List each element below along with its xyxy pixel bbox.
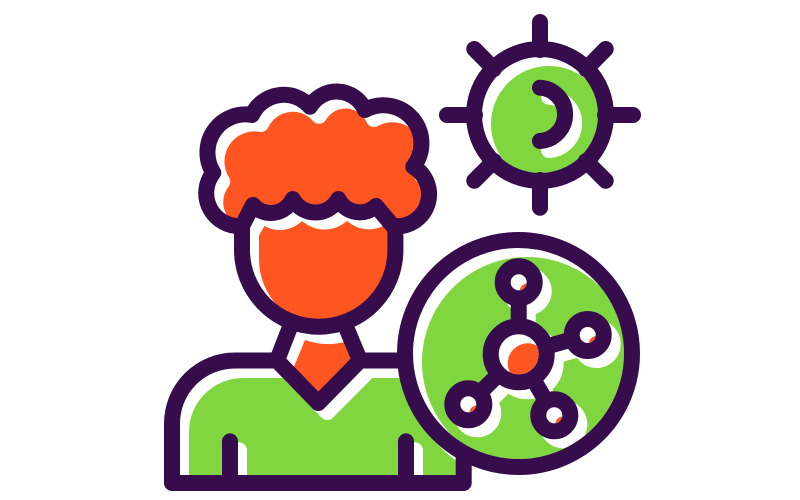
icon: person with virus and molecule	[164, 14, 641, 491]
badge: molecule in circle	[405, 240, 632, 467]
body outline	[172, 360, 464, 483]
virus ring	[474, 49, 606, 181]
virus fill	[491, 66, 598, 173]
collar	[277, 327, 360, 403]
face fill	[259, 220, 388, 319]
face outline	[242, 224, 395, 327]
badge fill with molecule shadow	[422, 257, 632, 467]
person torso	[164, 326, 472, 491]
sleeve lines	[230, 441, 406, 483]
shirt fill	[189, 378, 456, 475]
neck fill	[293, 340, 352, 392]
icon: virus	[447, 22, 633, 208]
virus spikes	[447, 22, 633, 208]
hair outline	[206, 92, 429, 226]
hair fill	[223, 108, 422, 218]
badge background	[405, 240, 632, 467]
molecule	[452, 266, 605, 432]
virus crescent	[540, 88, 565, 141]
badge ring	[405, 240, 632, 467]
person head and hair	[206, 92, 438, 336]
